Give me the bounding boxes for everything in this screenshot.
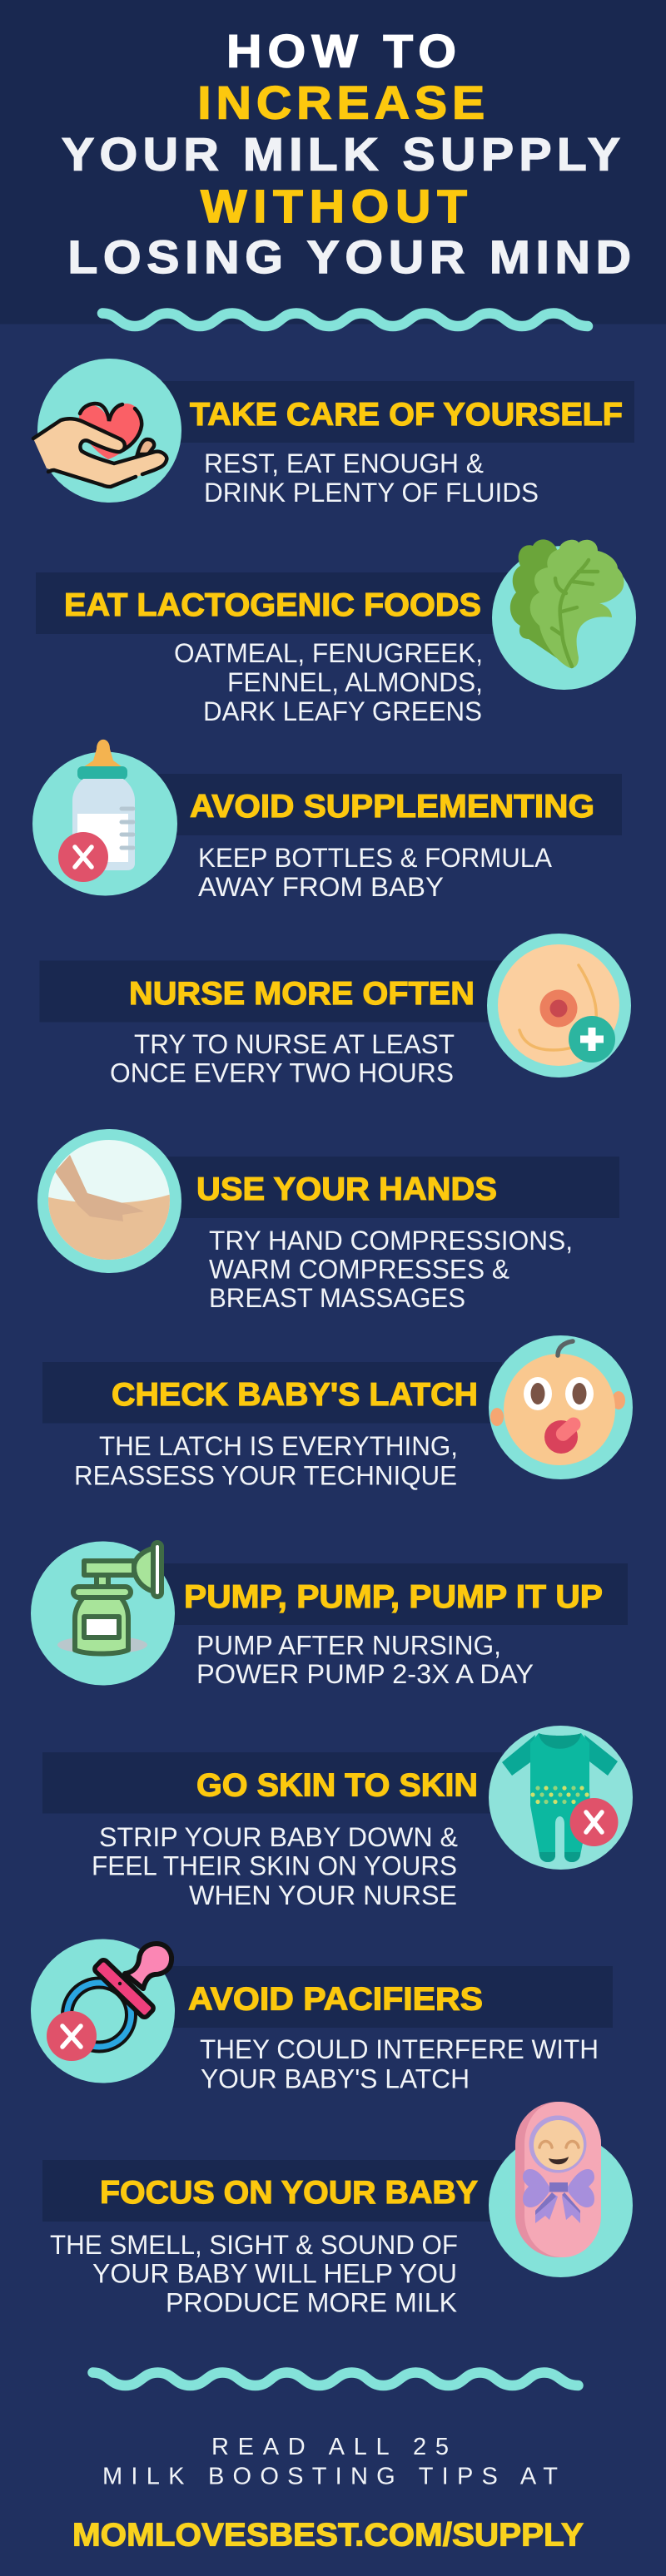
text block: BREAST MASSAGES (209, 1283, 465, 1313)
icon: hand holding heart (33, 404, 166, 487)
text block: WHEN YOUR NURSE (189, 1880, 457, 1910)
panel: pump (31, 1541, 628, 1689)
heading: NURSE MORE OFTEN (129, 976, 475, 1012)
text block: DRINK PLENTY OF FLUIDS (204, 478, 539, 508)
text block: THE LATCH IS EVERYTHING, (99, 1431, 458, 1461)
text block: REST, EAT ENOUGH & (204, 448, 484, 478)
icon: breast pump (73, 1543, 162, 1654)
text block: STRIP YOUR BABY DOWN & (99, 1822, 458, 1852)
icon: hand massaging (48, 1140, 170, 1260)
heading: TAKE CARE OF YOURSELF (190, 397, 623, 433)
panel: avoid supplementing (32, 740, 622, 902)
title (62, 26, 631, 284)
text block (92, 1822, 458, 1910)
text block: FEEL THEIR SKIN ON YOURS (92, 1850, 457, 1880)
panel: avoid pacifiers (31, 1939, 613, 2093)
heading: AVOID SUPPLEMENTING (190, 789, 594, 825)
text block: YOUR BABY WILL HELP YOU (92, 2258, 457, 2288)
text block: THE SMELL, SIGHT & SOUND OF (50, 2230, 458, 2260)
icon: baby bottle with cross (58, 740, 135, 882)
heading: FOCUS ON YOUR BABY (100, 2175, 478, 2211)
text block: DARK LEAFY GREENS (203, 696, 482, 726)
text block: POWER PUMP 2-3X A DAY (196, 1659, 534, 1689)
wave divider bottom (93, 2373, 578, 2385)
icon: pacifier with cross (47, 1944, 171, 2061)
text block (174, 638, 483, 726)
title: WITHOUT (201, 181, 467, 232)
panel: go skin to skin (42, 1726, 633, 1910)
panel: take care of yourself (33, 359, 634, 508)
title: HOW TO (226, 26, 456, 77)
panel: nurse more often (40, 934, 631, 1088)
title: INCREASE (197, 77, 485, 129)
text block (198, 843, 553, 902)
title: LOSING YOUR MIND (67, 231, 631, 284)
text block: WARM COMPRESSES & (209, 1255, 509, 1285)
wave divider top (102, 313, 588, 326)
text block (110, 1029, 455, 1088)
text block (74, 1431, 458, 1491)
heading: AVOID PACIFIERS (188, 1982, 483, 2017)
panel: focus on your baby (42, 2102, 633, 2318)
text block (204, 448, 539, 508)
heading: PUMP, PUMP, PUMP IT UP (184, 1579, 603, 1615)
text block: OATMEAL, FENUGREEK, (174, 638, 483, 668)
title: YOUR MILK SUPPLY (62, 129, 620, 181)
website link: MOMLOVESBEST.COM/SUPPLY (72, 2518, 584, 2553)
call to action text (102, 2434, 558, 2490)
text block: YOUR BABY'S LATCH (201, 2063, 470, 2093)
icon: breast with plus (498, 944, 619, 1066)
call to action text: MILK BOOSTING TIPS AT (102, 2464, 558, 2490)
text block: AWAY FROM BABY (198, 872, 444, 902)
text block: PUMP AFTER NURSING, (196, 1631, 501, 1661)
text block (196, 1631, 534, 1689)
icon: swaddled baby (515, 2102, 601, 2257)
panel: use your hands (37, 1129, 619, 1313)
heading: EAT LACTOGENIC FOODS (64, 587, 481, 623)
icon: onesie with cross (502, 1733, 618, 1862)
text block (50, 2230, 458, 2318)
text block: REASSESS YOUR TECHNIQUE (74, 1461, 457, 1491)
text block (200, 2034, 599, 2093)
call to action text: READ ALL 25 (211, 2434, 449, 2460)
heading: GO SKIN TO SKIN (196, 1767, 478, 1804)
panel: eat lactogenic foods (36, 539, 636, 726)
text block: TRY HAND COMPRESSIONS, (209, 1226, 573, 1256)
text block: PRODUCE MORE MILK (166, 2288, 457, 2318)
text block: THEY COULD INTERFERE WITH (200, 2034, 599, 2064)
text block: FENNEL, ALMONDS, (227, 667, 483, 697)
header banner (0, 0, 666, 324)
text block: ONCE EVERY TWO HOURS (110, 1058, 454, 1088)
panel: check baby's latch (42, 1335, 633, 1491)
text block: KEEP BOTTLES & FORMULA (198, 843, 553, 873)
text block (209, 1226, 573, 1313)
icon: leafy greens (510, 539, 624, 668)
heading: USE YOUR HANDS (196, 1172, 497, 1207)
heading: CHECK BABY'S LATCH (112, 1377, 478, 1413)
text block: TRY TO NURSE AT LEAST (134, 1029, 455, 1059)
icon: baby face (490, 1341, 625, 1465)
